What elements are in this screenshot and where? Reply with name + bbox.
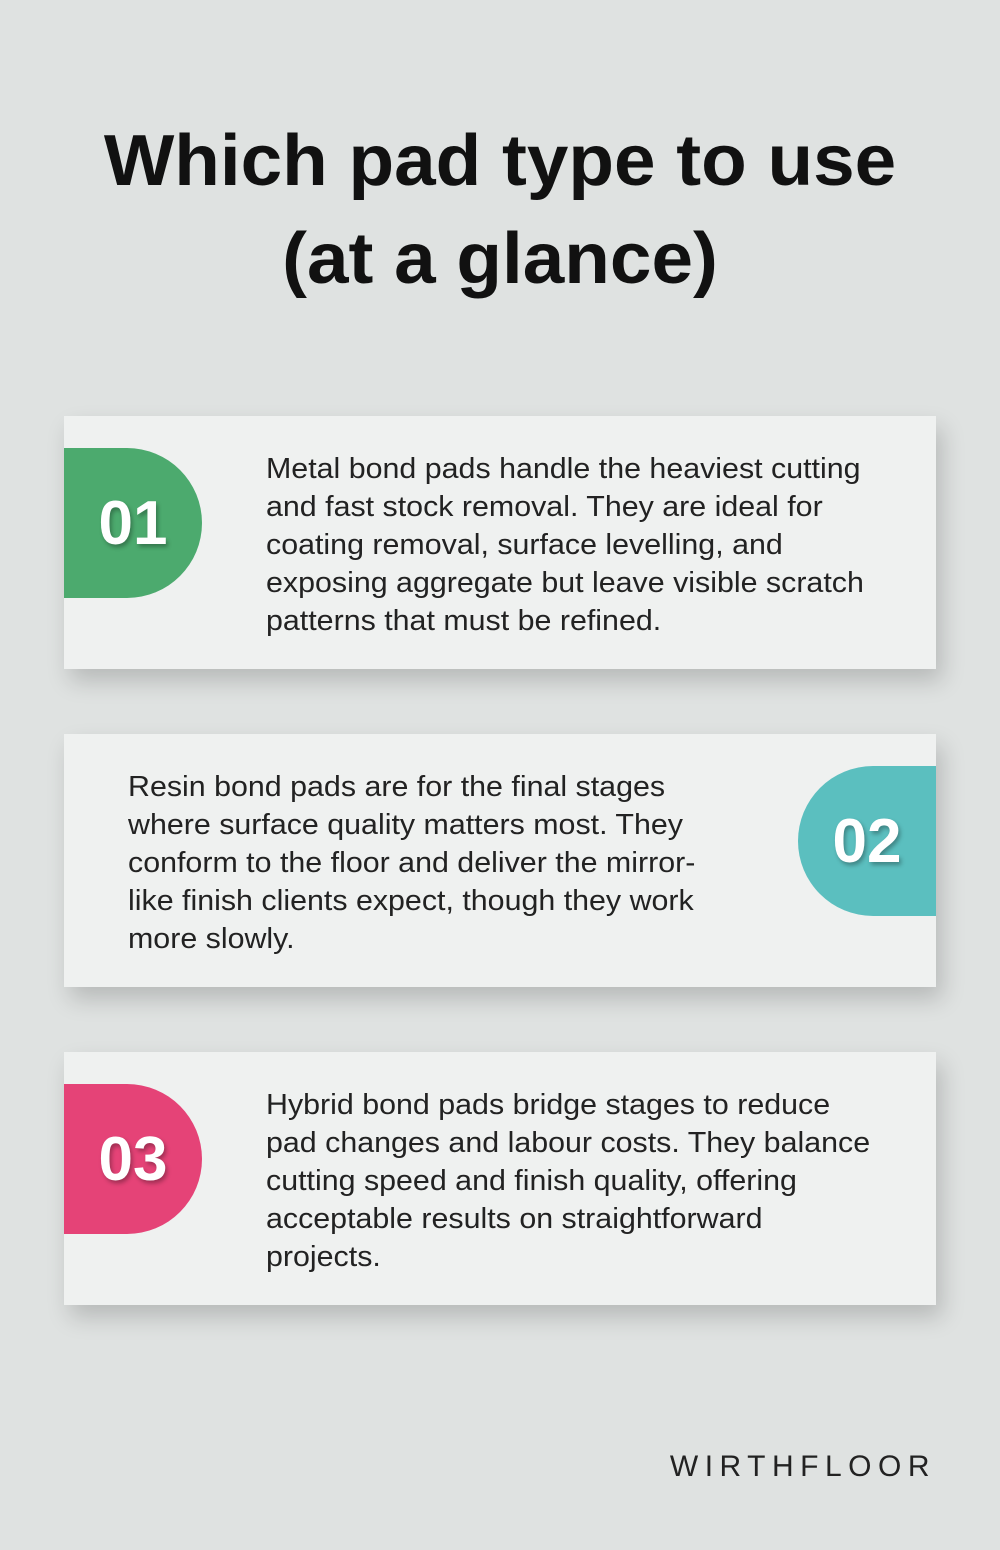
text: hybrid bond xyxy=(266,1089,870,1273)
badge 03 xyxy=(64,1084,202,1234)
text: resin bond: Resin bond pads are for the final stages xyxy=(128,771,665,803)
text: metal bond: exposing aggregate but leave visible scratch xyxy=(266,567,864,599)
panel: metal bond xyxy=(64,416,936,669)
text: metal bond: Metal bond pads handle the heaviest cutting xyxy=(266,453,861,485)
logo: WIRTHFLOOR xyxy=(670,1450,936,1483)
text: hybrid bond: projects. xyxy=(266,1241,381,1273)
text: hybrid bond: acceptable results on straightforward xyxy=(266,1203,762,1235)
text: resin bond: more slowly. xyxy=(128,923,295,955)
title: Which pad type to use xyxy=(104,121,896,201)
title: (at a glance) xyxy=(282,219,718,299)
text: resin bond xyxy=(128,771,695,955)
title xyxy=(104,121,896,299)
text: hybrid bond: cutting speed and finish quality, offering xyxy=(266,1165,797,1197)
badge 01 xyxy=(64,448,202,598)
text: hybrid bond: pad changes and labour costs. They balance xyxy=(266,1127,870,1159)
badge 02: 02 xyxy=(833,806,901,876)
text: resin bond: conform to the floor and deliver the mirror- xyxy=(128,847,695,879)
text: metal bond: patterns that must be refined. xyxy=(266,605,661,637)
panel: hybrid bond xyxy=(64,1052,936,1305)
badge 01: 01 xyxy=(99,488,167,558)
badge 03: 03 xyxy=(99,1124,167,1194)
text: resin bond: where surface quality matters most. They xyxy=(128,809,683,841)
text: metal bond: coating removal, surface levelling, and xyxy=(266,529,783,561)
text: metal bond: and fast stock removal. They are ideal for xyxy=(266,491,823,523)
text: hybrid bond: Hybrid bond pads bridge stages to reduce xyxy=(266,1089,830,1121)
badge 02 xyxy=(798,766,936,916)
text: metal bond xyxy=(266,453,864,637)
text: resin bond: like finish clients expect, though they work xyxy=(128,885,694,917)
panel: resin bond xyxy=(64,734,936,987)
